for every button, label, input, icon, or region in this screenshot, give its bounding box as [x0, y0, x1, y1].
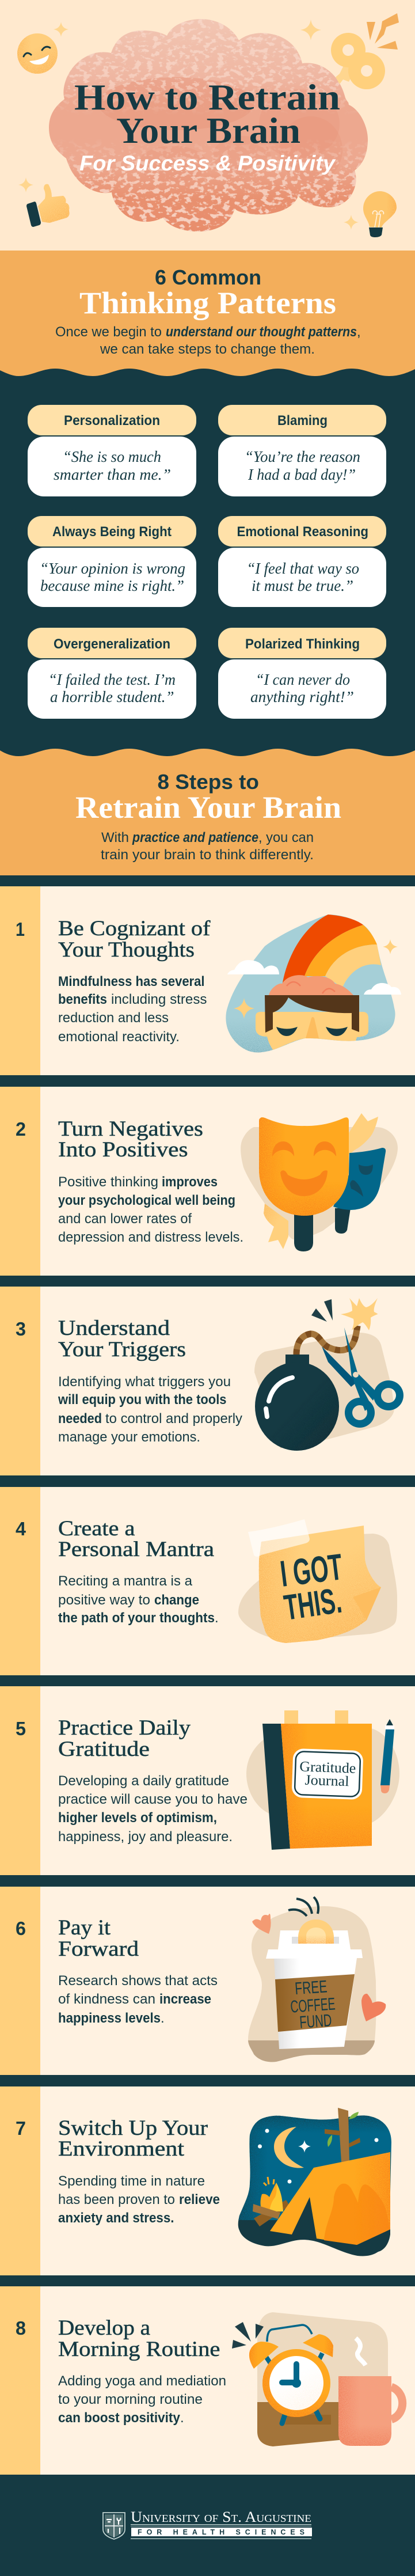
step text: relieve	[179, 2192, 220, 2207]
step text: will equip you with the tools	[58, 1392, 227, 1407]
icon: coffee cup	[248, 1897, 386, 2062]
step title: Switch Up Your	[58, 2116, 208, 2140]
card: polarized thinking	[218, 628, 386, 719]
step text: .	[215, 1610, 219, 1626]
step title: Forward	[58, 1937, 139, 1961]
heading	[79, 265, 336, 320]
icon: thumbs up	[26, 184, 69, 227]
logo: university name: FOR HEALTH SCIENCES	[138, 2528, 304, 2536]
title	[74, 77, 340, 175]
step text: Developing a daily gratitude	[58, 1773, 229, 1789]
card: polarized thinking: Polarized Thinking	[245, 636, 360, 652]
step text: and can lower rates of	[58, 1211, 192, 1227]
step number: 7	[16, 2118, 26, 2139]
card: always being right: Always Being Right	[52, 524, 172, 540]
journal label: Journal	[304, 1773, 349, 1789]
step number: 5	[16, 1718, 26, 1739]
card: personalization: “She is so much	[63, 448, 161, 465]
icon: sticky note: I GOT	[278, 1546, 345, 1595]
card: emotional reasoning	[218, 516, 386, 607]
step number: 2	[16, 1118, 26, 1140]
step text: happiness levels	[58, 2010, 161, 2026]
step text	[58, 1374, 242, 1445]
step text: improves	[162, 1174, 218, 1190]
step text: practice will cause you to have	[58, 1792, 248, 1807]
step title	[58, 1317, 186, 1361]
sparkles	[18, 20, 359, 230]
card: always being right	[28, 516, 196, 607]
step text: Adding yoga and mediation	[58, 2373, 226, 2389]
step text: to control and properly	[105, 1411, 242, 1427]
step title	[58, 1916, 139, 1961]
card: blaming: “You’re the reason	[245, 448, 360, 465]
step 1	[16, 915, 401, 1053]
icon: head with rainbow	[226, 915, 401, 1053]
logo: university shield	[103, 2513, 125, 2539]
card: always being right: because mine is right.”	[40, 577, 184, 594]
logo: university name	[131, 2509, 312, 2539]
step text	[58, 1773, 248, 1845]
step text: benefits	[58, 992, 107, 1007]
intro text: train your brain to think differently.	[101, 847, 314, 863]
step 2	[16, 1113, 398, 1251]
icon: alarm clock and mug	[232, 2312, 402, 2446]
step text: happiness, joy and pleasure.	[58, 1829, 233, 1845]
icon: wind-up key	[331, 13, 399, 89]
step 6	[16, 1897, 386, 2062]
step text	[58, 1973, 218, 2026]
step text: Positive thinking	[58, 1174, 158, 1190]
card: emotional reasoning: it must be true.”	[252, 577, 353, 594]
step title: Into Positives	[58, 1138, 188, 1162]
card: emotional reasoning: Emotional Reasoning	[237, 524, 368, 540]
card: personalization	[28, 405, 196, 496]
step 4	[16, 1517, 397, 1643]
step title	[58, 2116, 208, 2161]
step title: Gratitude	[58, 1737, 150, 1761]
journal label	[292, 1748, 363, 1800]
step text: .	[161, 2010, 165, 2026]
step title	[58, 1517, 214, 1561]
step title	[58, 1117, 203, 1162]
intro text: , you can	[258, 830, 314, 845]
step title: Develop a	[58, 2316, 150, 2340]
heading: 6 Common	[155, 265, 261, 289]
intro text	[101, 830, 314, 863]
step title	[58, 1716, 191, 1761]
card: overgeneralization	[28, 628, 196, 719]
step text: the path of your thoughts	[58, 1610, 215, 1626]
step text: Spending time in nature	[58, 2173, 205, 2189]
icon: tent at night	[236, 2108, 394, 2260]
step title: Be Cognizant of	[58, 917, 211, 940]
step text: Research shows that acts	[58, 1973, 218, 1989]
intro text: we can take steps to change them.	[100, 342, 315, 357]
icon: sticky note: THIS.	[281, 1581, 344, 1628]
step text: to your morning routine	[58, 2392, 203, 2407]
step number: 3	[16, 1318, 26, 1340]
step text	[58, 1573, 219, 1626]
brain illustration	[46, 17, 374, 236]
card: personalization: smarter than me.”	[54, 466, 171, 483]
step text: needed	[58, 1411, 102, 1427]
step title: Turn Negatives	[58, 1117, 203, 1141]
sleeve text: COFFEE	[290, 1994, 336, 2017]
title: Your Brain	[116, 110, 300, 151]
icon: gratitude journal	[246, 1710, 399, 1850]
step 7	[16, 2108, 394, 2260]
step text: manage your emotions.	[58, 1429, 200, 1445]
sleeve text: FREE	[294, 1977, 328, 1998]
step title: Understand	[58, 1317, 170, 1340]
card: emotional reasoning: “I feel that way so	[246, 560, 359, 577]
panel: 8 steps heading	[75, 770, 341, 863]
card: blaming: Blaming	[277, 413, 328, 428]
step title	[58, 917, 211, 962]
step number: 1	[16, 919, 25, 940]
step text: change	[154, 1592, 199, 1608]
intro text: practice and patience	[132, 830, 258, 845]
step text	[58, 2173, 220, 2226]
logo: university name: University of St. Augustine	[131, 2509, 311, 2525]
step text: higher levels of optimism,	[58, 1810, 217, 1826]
step 8	[16, 2312, 402, 2446]
step text	[58, 1174, 243, 1245]
card: polarized thinking: “I can never do	[256, 671, 350, 688]
panel: 6 common thinking patterns	[0, 251, 415, 875]
intro text: Once we begin to	[55, 324, 162, 340]
icon: bomb and scissors	[254, 1298, 403, 1451]
card: overgeneralization: “I failed the test. I’m	[48, 671, 176, 688]
card: overgeneralization: a horrible student.”	[50, 688, 174, 705]
step text: anxiety and stress.	[58, 2210, 174, 2226]
footer	[0, 2475, 415, 2576]
card: blaming: I had a bad day!”	[248, 466, 356, 483]
step text: including stress	[111, 992, 207, 1007]
card: blaming	[218, 405, 386, 496]
step number: 6	[16, 1918, 26, 1939]
step title: Environment	[58, 2137, 185, 2161]
card: polarized thinking: anything right!”	[250, 688, 354, 705]
title: How to Retrain	[74, 77, 340, 117]
card: overgeneralization: Overgeneralization	[54, 636, 170, 652]
step 3	[16, 1298, 403, 1451]
sleeve text	[288, 1976, 337, 2033]
step text: depression and distress levels.	[58, 1230, 243, 1245]
step title: Your Triggers	[58, 1338, 186, 1361]
step number: 8	[16, 2317, 26, 2339]
step text: .	[180, 2410, 184, 2426]
icon: sticky note	[238, 1519, 397, 1643]
intro text	[55, 324, 361, 357]
step title: Practice Daily	[58, 1716, 191, 1740]
step title: Pay it	[58, 1916, 111, 1940]
intro text: ,	[357, 324, 361, 340]
sleeve text: FUND	[299, 2011, 333, 2032]
step 5	[16, 1710, 399, 1850]
step number: 4	[16, 1518, 26, 1539]
step text: can boost positivity	[58, 2410, 181, 2426]
step title: Create a	[58, 1517, 135, 1541]
step title: Your Thoughts	[58, 938, 195, 962]
card: personalization: Personalization	[64, 413, 160, 428]
step text: Identifying what triggers you	[58, 1374, 231, 1390]
panel: 8 steps heading: Retrain Your Brain	[75, 790, 341, 825]
journal label: Gratitude	[299, 1759, 356, 1777]
step text: Mindfulness has several	[58, 974, 205, 989]
step text: of kindness can	[58, 1991, 155, 2007]
heading: Thinking Patterns	[79, 286, 336, 320]
icon: smiley	[17, 33, 58, 74]
step text: your psychological well being	[58, 1193, 235, 1208]
step text	[58, 974, 207, 1045]
intro text: With	[101, 830, 129, 845]
step title	[58, 2316, 220, 2361]
step title: Personal Mantra	[58, 1538, 214, 1561]
step text	[58, 2373, 226, 2426]
step text: increase	[159, 1991, 211, 2007]
card: always being right: “Your opinion is wrong	[40, 560, 185, 577]
intro text: understand our thought patterns	[166, 324, 357, 340]
icon: light bulb	[363, 191, 397, 237]
step text: positive way to	[58, 1592, 150, 1608]
title: For Success & Positivity	[79, 151, 336, 175]
hero panel	[0, 0, 415, 251]
dividers and step backgrounds	[0, 875, 415, 2576]
panel: 8 steps heading: 8 Steps to	[158, 770, 259, 794]
icon: theater masks	[241, 1113, 398, 1251]
step title: Morning Routine	[58, 2338, 220, 2361]
step text: reduction and less	[58, 1010, 169, 1026]
step text: emotional reactivity.	[58, 1029, 180, 1045]
step text: Reciting a mantra is a	[58, 1573, 193, 1589]
step text: has been proven to	[58, 2192, 175, 2207]
